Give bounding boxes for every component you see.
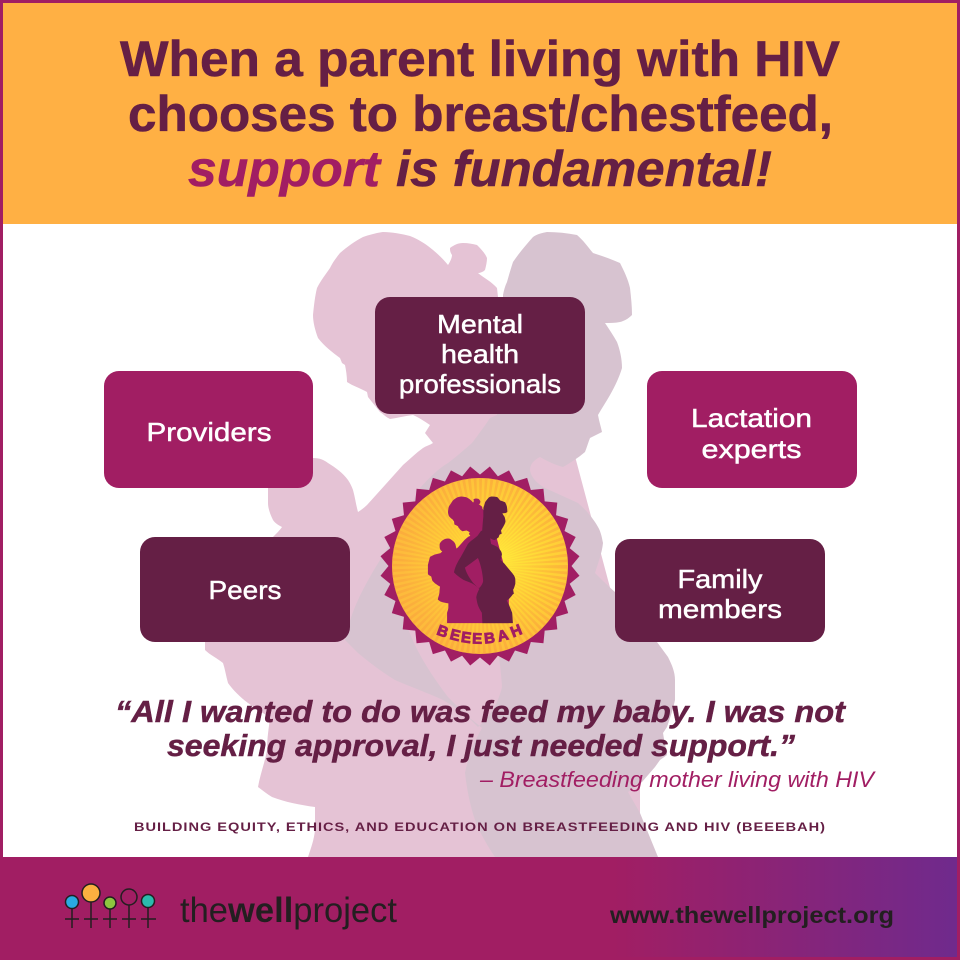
box: mental health professionals: Mental	[437, 309, 523, 339]
quote	[115, 694, 847, 763]
box: mental health professionals: professionals	[399, 369, 561, 399]
badge label: B	[483, 629, 496, 648]
header band	[0, 0, 960, 224]
box: family members: members	[658, 594, 782, 624]
badge label: H	[508, 621, 525, 641]
title: When a parent living with HIV	[120, 31, 841, 87]
quote: “All I wanted to do was feed my baby. I was not	[115, 694, 847, 729]
box: peers: Peers	[208, 575, 282, 605]
quote: seeking approval, I just needed support.”	[167, 728, 796, 763]
badge label: E	[448, 626, 462, 645]
logo wordmark: thewellproject	[180, 891, 397, 930]
logo icon: five figures	[65, 884, 156, 928]
box: family members: Family	[678, 564, 762, 594]
box: lactation experts	[647, 371, 857, 488]
caption: BUILDING EQUITY, ETHICS, AND EDUCATION ON BREASTFEEDING AND HIV (BEEEBAH)	[134, 820, 826, 834]
title: chooses to breast/chestfeed,	[128, 86, 833, 142]
title	[120, 31, 841, 197]
box: family members	[615, 539, 825, 642]
box: mental health professionals: health	[441, 339, 519, 369]
badge label	[435, 621, 525, 648]
badge silhouette	[428, 496, 515, 623]
box: lactation experts: experts	[702, 434, 802, 464]
footer band	[0, 857, 960, 960]
box: peers	[140, 537, 350, 642]
badge label: E	[460, 629, 472, 647]
title: is fundamental!	[396, 141, 772, 197]
badge: BEEEBAH seal	[371, 457, 589, 675]
logo: the well project	[65, 884, 397, 930]
quote attribution: – Breastfeeding mother living with HIV	[479, 767, 876, 792]
box: providers	[104, 371, 313, 488]
badge label: E	[472, 630, 482, 648]
box: lactation experts: Lactation	[691, 403, 812, 433]
box: mental health professionals	[375, 297, 585, 414]
website url: www.thewellproject.org	[609, 902, 894, 928]
badge label: A	[496, 627, 510, 646]
background silhouette: two parents	[205, 232, 675, 913]
box: providers: Providers	[146, 417, 272, 447]
badge label: B	[435, 622, 451, 642]
title: support	[188, 141, 382, 197]
